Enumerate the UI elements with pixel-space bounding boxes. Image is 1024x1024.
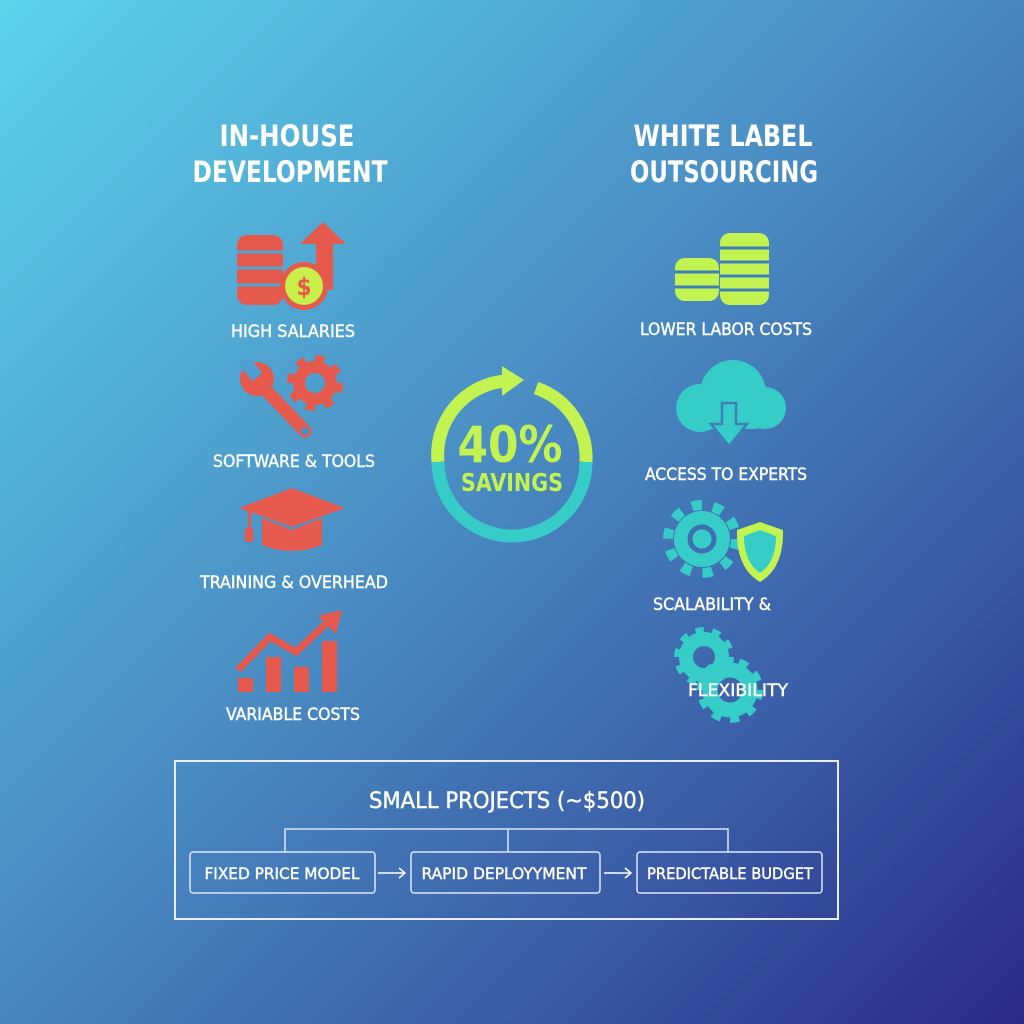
box: rapid deployment [411, 852, 600, 893]
arrow [604, 868, 631, 878]
title: in-house development: DEVELOPMENT [192, 155, 388, 189]
box: fixed price model: FIXED PRICE MODEL [204, 864, 360, 883]
label: scalability &: SCALABILITY & [653, 595, 771, 615]
icon: cloud with download arrow [676, 360, 786, 446]
label: variable costs: VARIABLE COSTS [226, 705, 360, 725]
box: rapid deployment: RAPID DEPLOYYMENT [422, 864, 587, 883]
icon: high salaries coins and arrow [237, 222, 346, 310]
label: training & overhead: TRAINING & OVERHEAD [199, 573, 388, 593]
text: 40%: 40% [458, 416, 562, 474]
icon: wrench and gear [238, 356, 339, 435]
icon: variable costs chart [238, 610, 342, 692]
icon: two gears [678, 631, 759, 719]
text: savings: SAVINGS [461, 468, 563, 497]
title: white label outsourcing: WHITE LABEL [634, 119, 812, 153]
label: high salaries: HIGH SALARIES [231, 322, 355, 342]
savings ring [438, 366, 586, 536]
heading: small projects: SMALL PROJECTS (~$500) [369, 789, 645, 814]
title: white label outsourcing: OUTSOURCING [630, 155, 818, 189]
icon: gear and shield [668, 505, 783, 582]
box: predictable budget [637, 852, 822, 893]
label: access to experts: ACCESS TO EXPERTS [645, 465, 807, 485]
label: software & tools: SOFTWARE & TOOLS [213, 452, 375, 472]
icon: graduation cap [239, 488, 345, 551]
label: lower labor costs: LOWER LABOR COSTS [640, 320, 812, 340]
icon: high salaries coins and arrow: $ [296, 273, 312, 301]
title: white label outsourcing [630, 119, 818, 189]
title: in-house development [192, 119, 388, 189]
box: fixed price model [190, 852, 375, 893]
arrow [378, 868, 405, 878]
title: in-house development: IN-HOUSE [220, 119, 354, 153]
label: flexibility: FLEXIBILITY [688, 681, 789, 701]
panel: small projects [175, 761, 838, 919]
box: predictable budget: PREDICTABLE BUDGET [647, 864, 813, 883]
icon: lower labor costs coins [675, 233, 769, 305]
